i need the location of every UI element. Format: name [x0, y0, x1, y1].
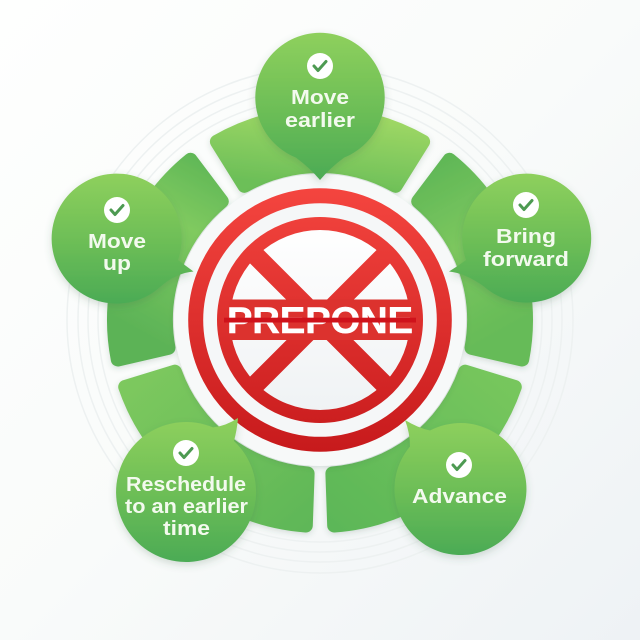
bubble: Reschedule to an earlier time	[116, 418, 256, 562]
icon: check	[307, 53, 333, 79]
bubble shape	[116, 418, 256, 562]
word: PREPONE: PREPONE	[227, 300, 413, 341]
label	[285, 86, 355, 132]
central prohibition badge	[174, 174, 466, 466]
bubble shape	[449, 174, 591, 303]
label: Move	[291, 86, 349, 109]
concentric background rings	[67, 67, 573, 573]
bubble shape	[394, 420, 526, 555]
icon: check	[513, 192, 539, 218]
icon: check	[173, 440, 199, 466]
segment: left	[114, 160, 222, 360]
label	[125, 473, 248, 540]
label: earlier	[285, 109, 355, 132]
segment: lower right	[332, 372, 515, 526]
label: to an earlier	[125, 495, 248, 518]
label: time	[163, 517, 210, 540]
segment: top	[217, 114, 423, 186]
bubble: Bring forward	[449, 174, 591, 303]
infographic: Prepone synonyms wheel	[50, 32, 596, 574]
bubble shape	[255, 33, 385, 180]
label: Move	[88, 230, 146, 253]
label	[483, 225, 569, 271]
bubble shape	[52, 174, 193, 304]
label	[88, 230, 146, 275]
segment: right	[418, 160, 526, 360]
label: Bring	[496, 225, 556, 248]
bubble: Move up	[52, 174, 193, 304]
label: Reschedule	[126, 473, 246, 496]
red X and text band	[231, 250, 410, 390]
white badge disc	[174, 174, 466, 466]
outer red ring	[196, 196, 444, 444]
inner disc and red ring	[224, 224, 416, 416]
green segment ring	[114, 114, 526, 525]
strikethrough line	[224, 318, 416, 322]
label: forward	[483, 248, 569, 271]
segment: lower left	[125, 372, 308, 526]
bubble: Advance	[394, 420, 526, 555]
icon: check	[446, 452, 472, 478]
label: up	[103, 252, 131, 275]
bubble: Move earlier	[255, 33, 385, 180]
icon: check	[104, 197, 130, 223]
label: Advance	[412, 485, 507, 508]
